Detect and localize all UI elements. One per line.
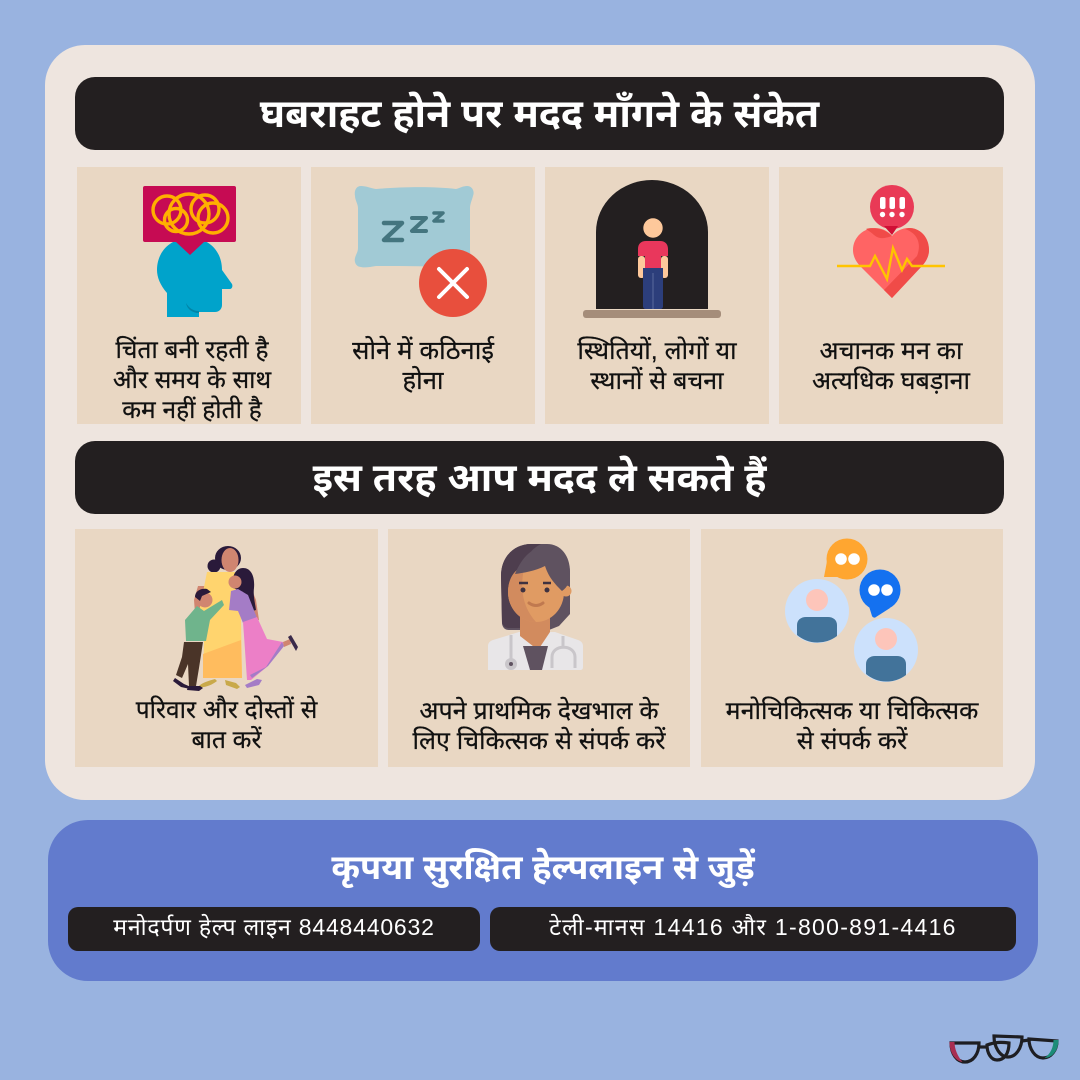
helpline heading: कृपया सुरक्षित हेल्पलाइन से जुड़ें — [331, 849, 755, 887]
blue speech bubble — [860, 570, 900, 618]
heading: how to get help: इस तरह आप मदद ले सकते हैं — [313, 457, 766, 500]
panel: avoidance — [545, 167, 769, 424]
caption — [136, 695, 318, 754]
panel: sudden panic — [779, 167, 1003, 424]
caption: होना — [403, 367, 443, 395]
caption: स्थितियों, लोगों या — [577, 337, 737, 365]
logo: glasses — [949, 1034, 1059, 1064]
caption: लिए चिकित्सक से संपर्क करें — [413, 726, 665, 754]
heading: how to get help — [75, 441, 1004, 514]
caption: अत्यधिक घबड़ाना — [812, 367, 970, 395]
caption — [412, 696, 666, 754]
caption — [726, 696, 979, 754]
helpline: Manodarpan — [68, 907, 480, 951]
main panel — [45, 45, 1035, 800]
orange speech bubble — [824, 538, 868, 580]
helpline: Tele-MANAS — [490, 907, 1016, 951]
caption — [812, 337, 970, 395]
helpline: Manodarpan: मनोदर्पण हेल्प लाइन 8448440632 — [113, 914, 435, 940]
panel: helpline footer — [48, 820, 1038, 981]
caption: मनोचिकित्सक या चिकित्सक — [726, 696, 978, 724]
caption — [352, 336, 494, 395]
panel: trouble sleeping — [311, 167, 535, 424]
caption: बात करें — [192, 726, 261, 754]
panel: primary care doctor — [388, 529, 690, 767]
heading: warning signs — [75, 77, 1004, 150]
caption: अपने प्राथमिक देखभाल के — [419, 696, 659, 724]
caption: अचानक मन का — [820, 337, 962, 365]
panel: talk to family — [75, 529, 378, 767]
caption: चिंता बनी रहती है — [116, 337, 268, 364]
caption: कम नहीं होती है — [122, 397, 262, 424]
heading: warning signs: घबराहट होने पर मदद माँगने के संकेत — [260, 93, 819, 136]
caption: से संपर्क करें — [797, 726, 907, 754]
helpline: Tele-MANAS: टेली-मानस 14416 और 1-800-891-4416 — [549, 914, 957, 940]
caption — [577, 336, 738, 395]
caption: स्थानों से बचना — [590, 367, 724, 395]
panel: contact a psychiatrist — [701, 529, 1003, 767]
caption: सोने में कठिनाई — [352, 337, 494, 365]
panel: persistent worry — [77, 167, 301, 424]
caption: और समय के साथ — [113, 367, 271, 394]
caption — [113, 335, 272, 424]
caption: परिवार और दोस्तों से — [136, 696, 317, 724]
